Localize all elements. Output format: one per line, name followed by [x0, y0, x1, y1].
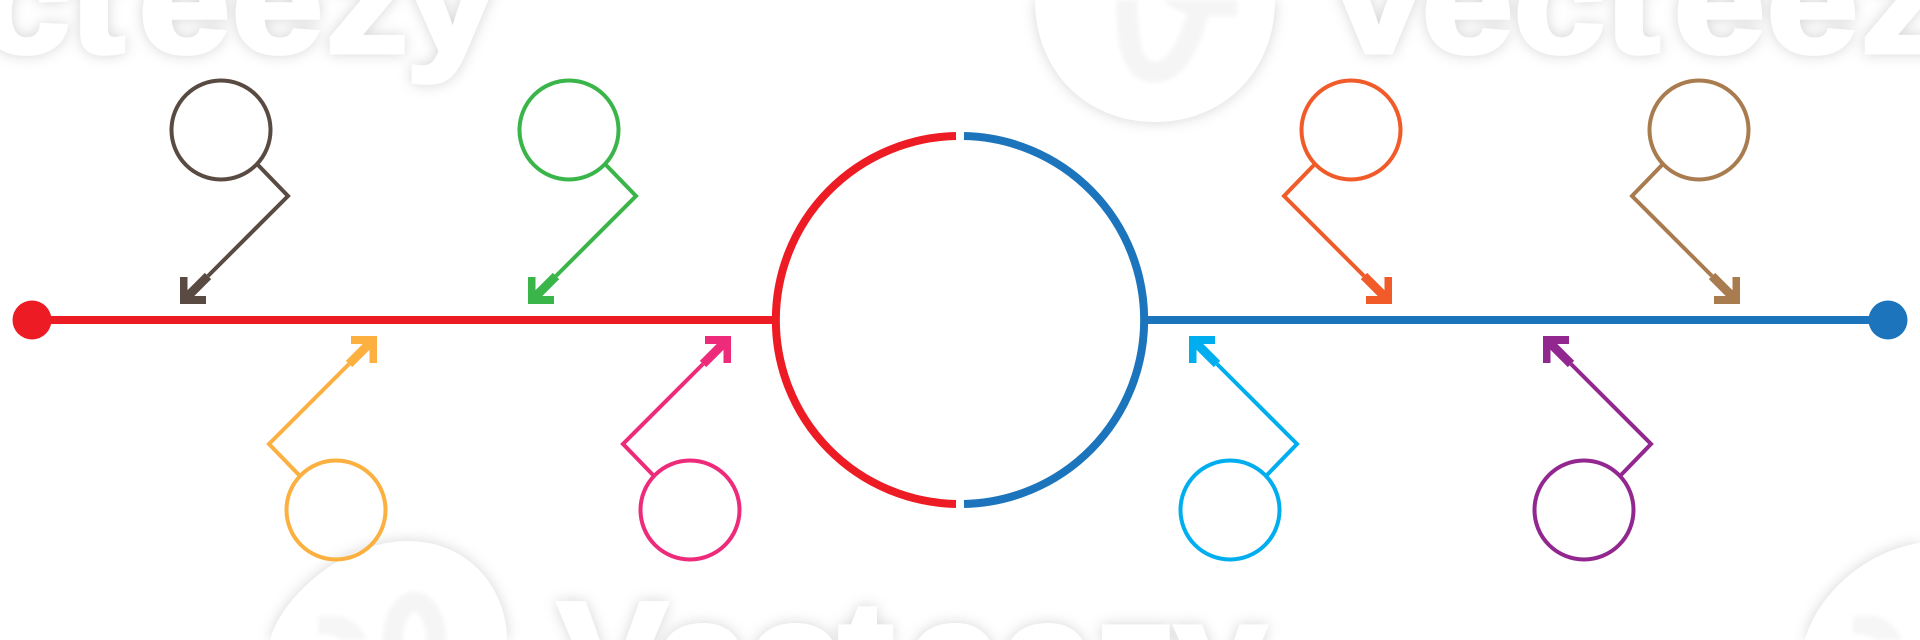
callout: tan circle with arrow [1632, 80, 1748, 304]
blue timeline bar with end dot [1144, 300, 1908, 340]
red timeline bar with start dot [12, 300, 776, 340]
central circle: blue right arc [964, 136, 1144, 504]
callout: green circle with arrow [520, 80, 636, 304]
watermark: bottom left logo [270, 541, 507, 640]
callout: amber circle with arrow [269, 336, 386, 560]
watermark: bottom right logo [1805, 543, 1920, 640]
callout: cyan circle with arrow [1180, 336, 1297, 560]
callout: orange circle with arrow [1284, 80, 1400, 304]
central circle: red left arc [776, 136, 956, 504]
callout: purple circle with arrow [1534, 336, 1651, 560]
callout: pink circle with arrow [623, 336, 740, 560]
watermark: top logo [1035, 0, 1275, 122]
callout: brown circle with arrow [172, 80, 288, 304]
